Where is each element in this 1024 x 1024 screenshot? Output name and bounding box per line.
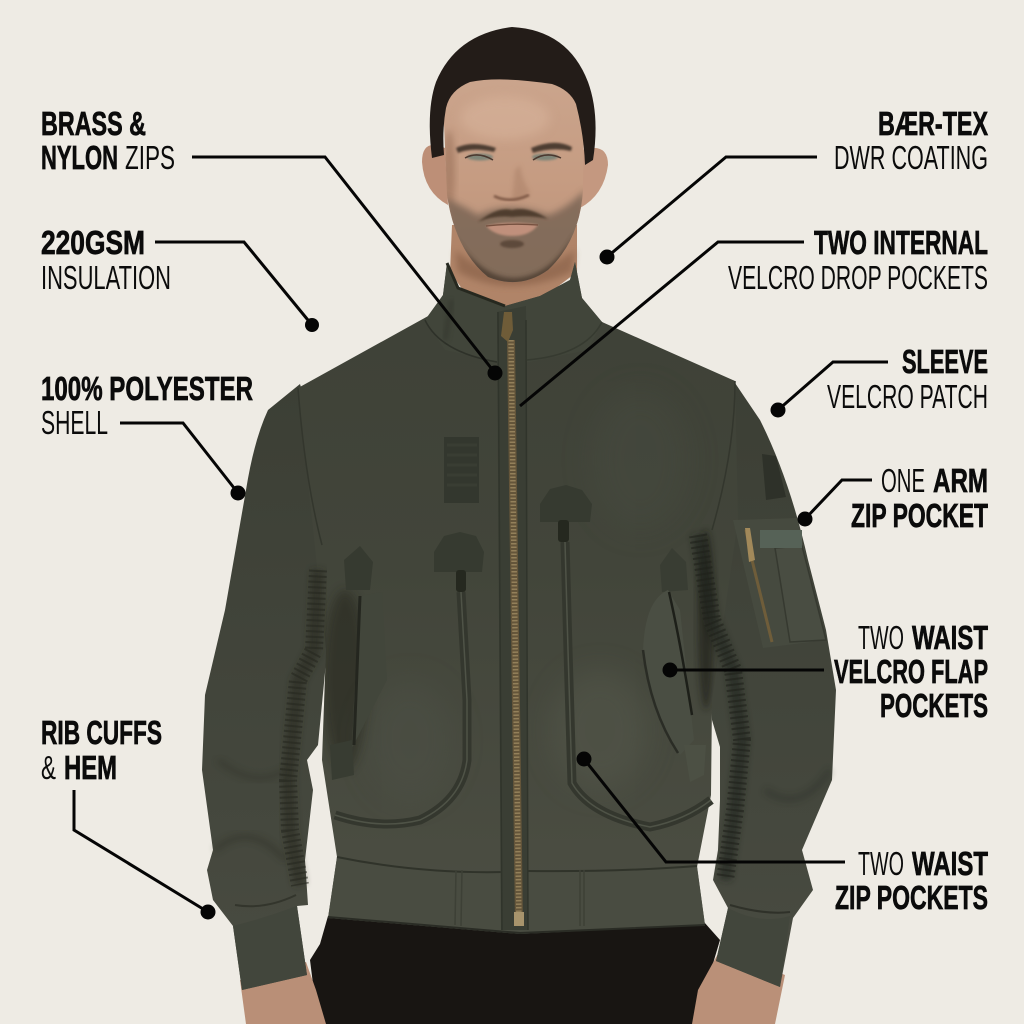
left cuff bbox=[233, 906, 307, 990]
callout: one arm zip pocket bbox=[798, 462, 988, 534]
brass zipper bbox=[501, 312, 524, 926]
left chest flap and zip pull bbox=[434, 532, 484, 592]
callout: sleeve velcro patch bbox=[770, 343, 988, 418]
callout: two waist velcro flap pockets: TWO bbox=[858, 619, 904, 656]
centre zip placket bbox=[497, 306, 528, 930]
jacket shading bbox=[323, 390, 714, 800]
lip line bbox=[486, 224, 538, 226]
collar bbox=[425, 262, 602, 362]
neck bbox=[450, 225, 577, 310]
forehead highlight bbox=[466, 101, 544, 136]
eyebrows bbox=[456, 143, 572, 153]
left sleeve ruching bbox=[215, 570, 318, 906]
trousers bbox=[310, 916, 720, 1024]
callout: rib cuffs and hem: RIB CUFFS bbox=[41, 714, 162, 751]
arm zip pocket bbox=[733, 518, 826, 648]
callout: two waist velcro flap pockets: WAIST bbox=[912, 619, 988, 656]
callout: 220gsm insulation: 220GSM bbox=[41, 224, 145, 261]
right cuff bbox=[716, 908, 790, 987]
callout: one arm zip pocket: ARM bbox=[933, 462, 988, 499]
jacket right sleeve bbox=[700, 380, 836, 987]
chest velcro patch bbox=[444, 437, 479, 503]
callout: polyester shell: SHELL bbox=[41, 404, 108, 441]
jacket left sleeve bbox=[202, 384, 332, 990]
callout: 220gsm insulation: INSULATION bbox=[41, 259, 171, 296]
callout: two internal velcro drop pockets bbox=[520, 224, 988, 406]
moustache bbox=[478, 209, 548, 222]
callout: two waist zip pockets bbox=[576, 752, 988, 916]
callout: polyester shell bbox=[41, 370, 253, 500]
model photograph: man wearing jacket bbox=[202, 27, 836, 1024]
right chest flap and zip pull bbox=[540, 485, 592, 542]
jacket body bbox=[298, 262, 738, 934]
nostrils bbox=[494, 195, 529, 200]
callout: 220gsm insulation bbox=[41, 224, 319, 332]
left waist zip pocket track bbox=[335, 592, 467, 824]
callout: two waist zip pockets: WAIST bbox=[912, 845, 988, 882]
callout: one arm zip pocket: ONE bbox=[881, 462, 925, 499]
jacket hem bbox=[328, 857, 705, 934]
ears bbox=[422, 145, 608, 208]
neck shadow under chin bbox=[455, 250, 575, 286]
callout: rib cuffs and hem: & bbox=[41, 749, 56, 786]
hands bbox=[240, 950, 785, 1024]
beard bbox=[448, 190, 583, 282]
callout: two waist zip pockets: TWO bbox=[858, 845, 904, 882]
shoulder seams bbox=[298, 381, 735, 545]
callout: rib cuffs and hem bbox=[41, 714, 216, 920]
callout: baer-tex dwr coating bbox=[600, 105, 988, 264]
eyes bbox=[465, 154, 561, 160]
callout: brass and nylon zips bbox=[41, 105, 502, 380]
callout: rib cuffs and hem: HEM bbox=[64, 749, 117, 786]
sleeve velcro patch bbox=[762, 454, 786, 500]
jaw beard darker bbox=[464, 238, 571, 282]
right waist velcro flap pocket bbox=[643, 548, 706, 782]
callout: brass and nylon zips: ZIPS bbox=[125, 139, 175, 176]
left waist velcro flap pocket bbox=[330, 546, 387, 780]
nose bbox=[512, 165, 530, 200]
soul patch bbox=[500, 240, 524, 248]
face bbox=[443, 74, 585, 295]
right waist zip pocket track bbox=[565, 542, 711, 827]
callout: brass and nylon zips: BRASS & bbox=[41, 105, 146, 142]
hair bbox=[430, 27, 596, 165]
callout: two waist velcro flap pockets bbox=[662, 619, 988, 724]
callout: brass and nylon zips: NYLON bbox=[41, 139, 118, 176]
left cheek shading bbox=[443, 130, 455, 210]
mouth bbox=[486, 223, 538, 236]
right sleeve ruching bbox=[698, 535, 830, 913]
callout: polyester shell: 100% POLYESTER bbox=[41, 370, 253, 407]
